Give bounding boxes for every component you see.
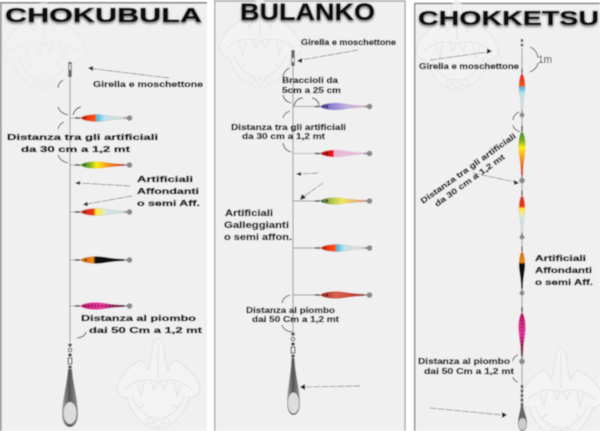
lure 1 (70, 114, 132, 122)
label: 1m: 1m (538, 54, 552, 66)
lure 3 (519, 191, 525, 239)
lure 3 (293, 197, 372, 205)
label: distance between lures (419, 132, 518, 209)
watermark: jaw bottom (117, 339, 200, 428)
label: sinking lures: Affondanti (137, 186, 199, 196)
label: distance to sinker (246, 306, 339, 324)
lure 5 (518, 307, 526, 364)
label: sinking lures: Artificiali (535, 253, 586, 263)
icon: swivel and snap (521, 39, 523, 48)
lure 1 (293, 103, 372, 110)
label: floating lures: Galleggianti (224, 220, 289, 230)
label: distance between lures: Distanza tra gli artificiali (7, 132, 158, 142)
lure 4 (293, 244, 372, 252)
icon: sinker (287, 332, 300, 415)
icon: swivel and snap (291, 50, 295, 66)
lure 3 (70, 208, 132, 216)
panel: Chokubula (0, 1, 207, 431)
label: distance to sinker: dai 50 Cm a 1,2 mt (89, 325, 202, 335)
lure 1 (519, 69, 525, 117)
label: distance between lures (231, 123, 346, 141)
label: distance to sinker: Distanza al piombo (418, 357, 510, 366)
lure 5 (70, 302, 132, 310)
label: distance between lures: Distanza tra gli artificiali (419, 132, 518, 206)
arrows and brackets (58, 66, 169, 338)
main line (69, 75, 71, 342)
main line (292, 62, 294, 332)
main line (521, 48, 523, 431)
label: branch length: Braccioli da (282, 76, 339, 85)
label: sinking lures: Affondanti (535, 265, 592, 275)
label: distance between lures: Distanza tra gli artificiali (231, 123, 346, 132)
label: distance between lures: da 30 cm a 1,2 mt (21, 144, 130, 154)
title: CHOKUBULA (5, 5, 202, 27)
label: branch length (282, 76, 341, 95)
label: distance to sinker: dai 50 Cm a 1,2 mt (424, 367, 514, 376)
title: CHOKKETSU (418, 8, 599, 30)
icon: swivel and snap (68, 62, 72, 77)
icon: sinker (518, 385, 527, 431)
label: sinking lures: Artificiali (137, 174, 193, 184)
label: sinking lures: o semi Aff. (535, 277, 593, 287)
label: floating lures (224, 208, 292, 242)
label: branch length: 5cm a 25 cm (282, 86, 341, 95)
lure 2 (293, 150, 372, 157)
label: distance between lures: da 30 cm a 1,2 mt (242, 132, 325, 141)
label: distance between lures: da 30 cm a 1,2 mt (433, 152, 507, 209)
label: sinking lures (535, 253, 593, 287)
panel: Chokketsu (414, 1, 600, 431)
label: distance to sinker: Distanza al piombo (246, 306, 335, 315)
label: floating lures: o semi affon. (224, 232, 292, 242)
lure 4 (70, 256, 132, 264)
label: distance to sinker: Distanza al piombo (81, 313, 196, 323)
watermark: jaw bottom (520, 349, 600, 431)
label: sinking lures (137, 174, 200, 208)
watermark: jaw top (416, 1, 499, 90)
label: distance to sinker (418, 357, 514, 376)
lure 5 (293, 291, 372, 299)
arrows and brackets (282, 50, 360, 390)
label: floating lures: Artificiali (225, 208, 273, 218)
label: sinking lures: o semi Aff. (137, 198, 200, 208)
panel: Bulanko (214, 0, 405, 431)
label: swivel: Girella e moschettone (419, 62, 520, 71)
arrows and brackets (430, 47, 538, 418)
lure 2 (70, 161, 132, 169)
lure 4 (519, 247, 525, 295)
watermark: jaw top (3, 1, 86, 90)
watermark: jaw (219, 0, 302, 87)
label: swivel: Girella e moschettone (301, 38, 397, 47)
label: swivel: Girella e moschettone (93, 80, 204, 89)
label: distance to sinker (81, 313, 202, 335)
lure 2 (518, 126, 526, 183)
icon: sinker (62, 343, 78, 427)
label: distance to sinker: dai 50 Cm a 1,2 mt (252, 315, 339, 324)
label: distance between lures (7, 132, 158, 154)
